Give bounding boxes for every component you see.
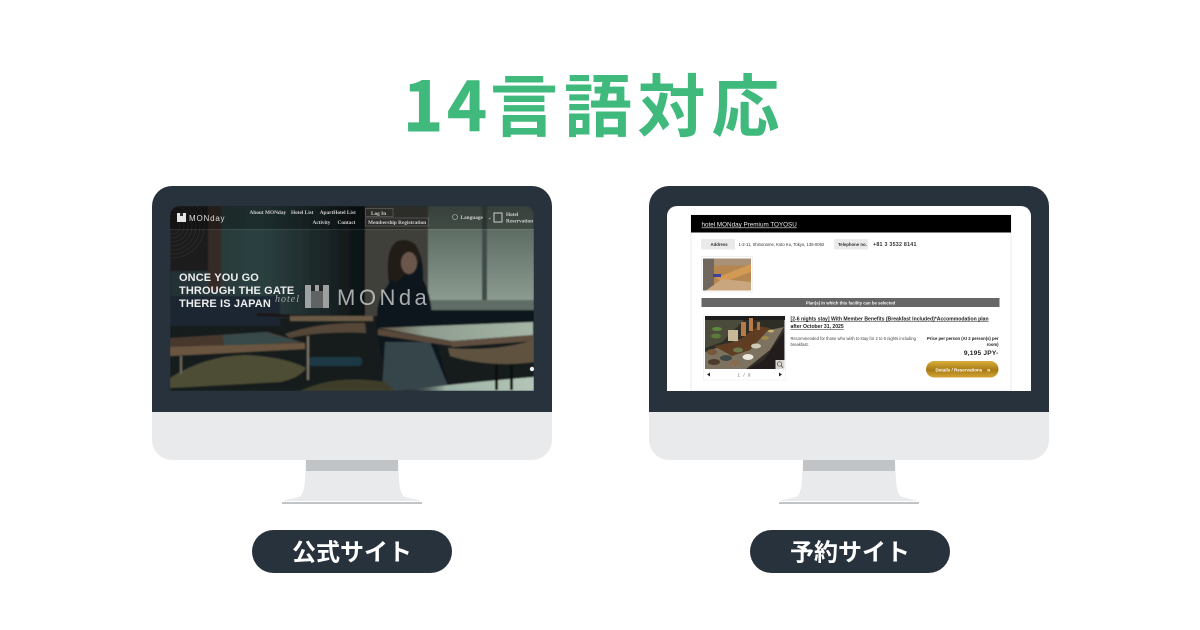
plan description: breakfast.: [790, 342, 809, 347]
monitor: official site: [140, 186, 552, 504]
title: 1: [403, 52, 443, 151]
navigation: Hotel List: [291, 210, 314, 216]
navigation: Language: [460, 215, 484, 221]
plan gallery: [704, 315, 786, 380]
title: 対: [638, 52, 706, 151]
title: 語: [564, 52, 632, 151]
price: [927, 336, 999, 357]
monitor stand: [282, 460, 422, 504]
navigation: Activity: [312, 220, 331, 226]
plan description: Recommended for those who wish to stay for 2 to 6 nights including: [790, 336, 917, 341]
title: 4: [447, 52, 487, 151]
plan title: [2-6 nights stay] With Member Benefits (Breakfast Included)*Accommodation plan: [790, 316, 989, 322]
plans heading: Plan(s) in which this facility can be selected: [806, 300, 896, 305]
tables: [257, 313, 304, 318]
screen: reservation page: [667, 206, 1031, 391]
site logo: [177, 213, 225, 223]
title: 言: [490, 52, 558, 151]
hero photograph: [170, 206, 534, 391]
reservation button: Details / Reservations: [936, 368, 983, 372]
address row: Address: [710, 242, 728, 247]
plan description: [790, 336, 916, 346]
hero copy: ONCE YOU GO: [179, 272, 259, 284]
plans heading: [702, 298, 1000, 307]
address row: Telephone no.: [838, 242, 867, 247]
monitor: booking site: [649, 186, 1049, 504]
label: booking site: [750, 530, 950, 573]
nav overlay: [170, 206, 534, 229]
reservation button: [926, 361, 998, 378]
monitor chin: [649, 412, 1049, 460]
hero logo: [275, 285, 430, 310]
facility photo: [702, 256, 752, 292]
label: official site: 公式サイト: [292, 532, 412, 568]
hotel name bar: hotel MONday Premium TOYOSU: [702, 222, 797, 228]
hero copy: THROUGH THE GATE: [179, 285, 294, 297]
site logo: MONday: [189, 214, 225, 223]
title: [403, 52, 780, 151]
plan title: [790, 316, 989, 330]
address row: +81 3 3532 8141: [873, 242, 917, 248]
hero copy: [179, 274, 294, 307]
navigation: About MONday: [250, 210, 286, 216]
navigation: [250, 208, 533, 226]
address row: 1-2-11, Shinonome, Koto Ku, Tokyo, 135-0062: [738, 242, 825, 247]
monitor bezel: [152, 186, 552, 412]
navigation: Reservation: [506, 218, 533, 224]
price: 9,195 JPY-: [964, 350, 998, 357]
concentric wall rings: [170, 206, 204, 258]
plan title: after October 31, 2025: [790, 324, 844, 330]
title: 応: [712, 52, 780, 151]
monitor bezel: [649, 186, 1049, 412]
label: official site: [252, 530, 452, 573]
reservation button: »: [987, 368, 991, 374]
screen: hotel website hero: [170, 206, 534, 391]
label: booking site: 予約サイト: [790, 532, 910, 568]
navigation: Contact: [338, 220, 356, 226]
hero logo: hotel: [275, 294, 300, 305]
navigation: Log In: [371, 211, 386, 217]
price: room): [987, 342, 999, 347]
woman: [376, 250, 446, 378]
monitor stand: [779, 460, 919, 504]
hero copy: THERE IS JAPAN: [179, 298, 271, 310]
gallery pager: 1 / 9: [738, 372, 751, 377]
monitor chin: [152, 412, 552, 460]
chairs: [170, 355, 306, 388]
navigation: Membership Registration: [368, 220, 426, 226]
navigation: ApartHotel List: [320, 210, 356, 216]
magnifier icon: [776, 360, 784, 369]
price: Price per person (At 2 person(s) per: [927, 336, 999, 341]
hotel name bar: [691, 215, 1011, 232]
navigation: ⌄: [488, 215, 491, 220]
address row: [701, 239, 917, 250]
navigation: Hotel: [506, 212, 519, 218]
hero logo: MONda: [337, 285, 430, 310]
